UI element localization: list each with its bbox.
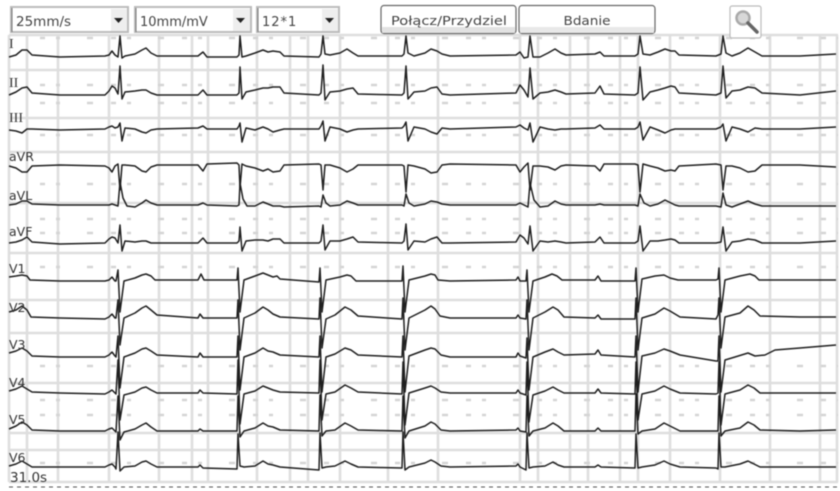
select: paper speed <box>11 7 128 32</box>
lead labels: aVF <box>9 224 32 239</box>
button: Połącz/Przydziel <box>381 6 516 34</box>
trace: lead V4 <box>9 360 836 425</box>
trace: lead V6 <box>9 432 836 471</box>
select: lead layout: 12*1 <box>262 15 297 30</box>
trace: lead V1 <box>9 266 836 312</box>
trace: lead V5 <box>9 394 836 440</box>
trace: lead aVL <box>9 182 836 207</box>
select: amplitude <box>135 7 251 32</box>
lead labels: V5 <box>9 412 26 427</box>
lead labels: V3 <box>9 337 26 352</box>
button: Połącz/Przydziel: Połącz/Przydziel <box>391 14 507 28</box>
lead labels: II <box>9 76 19 91</box>
trace: lead V3 <box>9 336 836 392</box>
button: Bdanie <box>519 6 655 34</box>
lead labels: III <box>9 111 23 126</box>
lead labels: aVL <box>9 188 32 203</box>
select: paper speed: 25mm/s <box>16 14 71 30</box>
lead labels: V2 <box>9 300 26 315</box>
lead labels: aVR <box>9 149 34 164</box>
icon: magnifier <box>730 6 761 38</box>
button: Bdanie: Bdanie <box>564 14 610 28</box>
trace: lead aVR <box>9 163 836 192</box>
select: amplitude: 10mm/mV <box>140 15 208 30</box>
trace: lead I <box>9 36 836 58</box>
lead labels: I <box>9 37 14 52</box>
trace: lead V2 <box>9 298 836 350</box>
time label: 31.0s <box>10 470 47 486</box>
trace: lead III <box>9 121 836 142</box>
lead labels: V4 <box>9 375 26 390</box>
lead labels: V6 <box>9 450 26 465</box>
lead labels: V1 <box>9 261 26 276</box>
trace: lead aVF <box>9 224 836 251</box>
dashed time axis <box>9 486 838 488</box>
select: lead layout <box>257 7 339 32</box>
trace: lead II <box>9 65 836 100</box>
lead labels <box>9 37 34 465</box>
